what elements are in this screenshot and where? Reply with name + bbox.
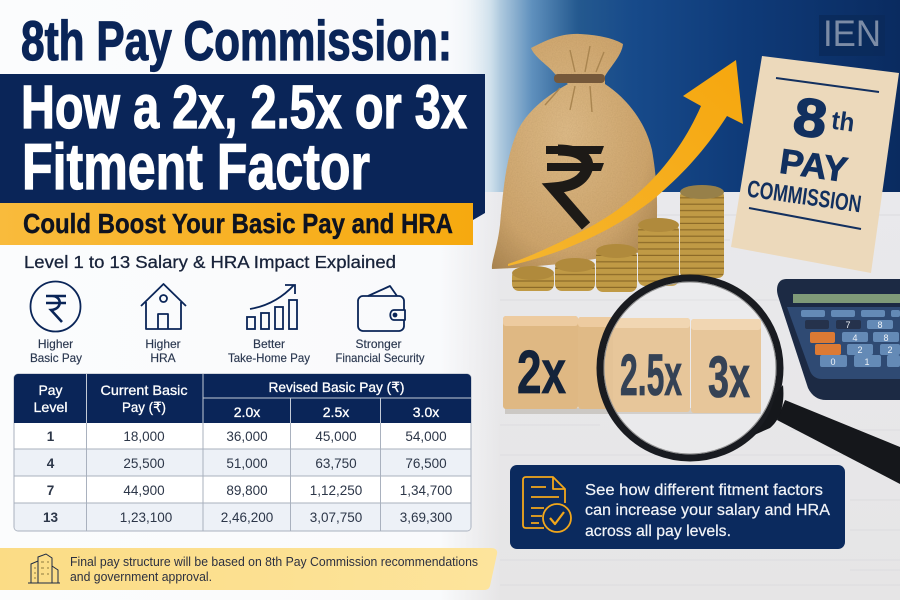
benefit: better take-home pay (228, 285, 310, 365)
table: revised basic pay: Level (34, 399, 68, 415)
wooden factor blocks: 2x (517, 338, 566, 406)
benefit: higher basic pay (30, 282, 82, 365)
footer note: and government approval. (70, 570, 212, 584)
calculator: 8 (877, 320, 883, 330)
yellow subtitle ribbon: Could Boost Your Basic Pay and HRA (23, 208, 453, 239)
table: revised basic pay: Pay (₹) (122, 399, 166, 415)
table: revised basic pay: 1,23,100 (120, 510, 172, 525)
table: revised basic pay: 1,34,700 (400, 483, 452, 498)
yellow subtitle ribbon (0, 203, 473, 245)
benefit: higher basic pay: Higher (38, 337, 73, 351)
8th Pay Commission card (731, 56, 899, 273)
benefit: better take-home pay: Take-Home Pay (228, 351, 310, 365)
calculator: 7 (845, 320, 851, 330)
8th Pay Commission card: 8 (790, 87, 831, 151)
benefit: stronger financial security: Stronger (355, 337, 402, 351)
left content background (0, 0, 500, 600)
illustration: money bag (492, 34, 657, 269)
table: revised basic pay: Current Basic (100, 382, 188, 398)
table: revised basic pay: 13 (43, 510, 58, 525)
table: revised basic pay: 3,69,300 (400, 510, 452, 525)
wooden factor blocks (503, 316, 761, 414)
footer note: Final pay structure will be based on 8th Pay Commission recommendations (70, 555, 478, 569)
table: revised basic pay: 89,800 (226, 483, 268, 498)
benefit: stronger financial security: Financial Security (336, 351, 424, 365)
table: revised basic pay: 2.0x (234, 404, 260, 420)
icon: rupee on bag (546, 146, 604, 226)
table: revised basic pay: 7 (47, 483, 54, 498)
table: revised basic pay: 51,000 (226, 456, 268, 471)
table: revised basic pay: 1,12,250 (310, 483, 362, 498)
table: revised basic pay: 76,500 (405, 456, 447, 471)
table: revised basic pay: 2.5x (323, 404, 349, 420)
watermark: IEN: IEN (823, 13, 881, 54)
icon: document with check (523, 477, 571, 532)
callout: see how different factors (510, 465, 845, 549)
calculator: 2 (887, 345, 893, 355)
calculator (777, 279, 900, 400)
coin stacks (512, 185, 724, 292)
calculator: 0 (830, 357, 836, 367)
table: revised basic pay: 44,900 (123, 483, 165, 498)
callout: see how different factors: See how different fitment factors (585, 482, 823, 499)
table: revised basic pay: 1 (47, 429, 55, 444)
table: revised basic pay: 18,000 (123, 429, 165, 444)
wooden desk surface (440, 192, 900, 600)
table: revised basic pay: 4 (47, 456, 55, 471)
benefit: higher HRA (141, 284, 186, 365)
table: revised basic pay: 63,750 (315, 456, 357, 471)
wooden factor blocks: 3x (708, 345, 750, 410)
callout: see how different factors: across all pay levels. (585, 523, 731, 540)
table: revised basic pay: 45,000 (315, 429, 357, 444)
calculator: 1 (864, 357, 870, 367)
table: revised basic pay (14, 374, 471, 531)
table: revised basic pay: 54,000 (405, 429, 447, 444)
table: revised basic pay: Pay (38, 382, 62, 398)
footer note (0, 548, 497, 590)
table: revised basic pay: 25,500 (123, 456, 165, 471)
sky backdrop (440, 0, 900, 193)
8th Pay Commission card: PAY (777, 142, 850, 190)
calculator: 8 (883, 333, 889, 343)
calculator: 2 (857, 345, 863, 355)
table: revised basic pay: 36,000 (226, 429, 268, 444)
title banner (0, 73, 485, 220)
8th Pay Commission card: th (830, 105, 857, 138)
table: revised basic pay: 3.0x (413, 404, 439, 420)
calculator: 4 (852, 333, 858, 343)
benefit: stronger financial security (336, 286, 424, 365)
magnifying glass (600, 278, 900, 484)
benefit: higher HRA: Higher (145, 337, 181, 351)
growth arrow (508, 60, 743, 266)
title banner: Fitment Factor (22, 130, 370, 203)
benefit: higher basic pay: Basic Pay (30, 351, 82, 365)
benefit: better take-home pay: Better (253, 337, 285, 351)
callout: see how different factors: can increase your salary and HRA (585, 502, 831, 519)
wooden factor blocks: 2.5x (620, 343, 682, 408)
title: 8th Pay Commission: 8th Pay Commission: (21, 9, 452, 72)
icon: buildings (28, 554, 60, 583)
title banner: How a 2x, 2.5x or 3x (21, 73, 467, 141)
subheading: Level 1 to 13 Salary & HRA Impact Explained (24, 252, 396, 272)
benefit: higher HRA: HRA (150, 351, 176, 365)
table: revised basic pay: 3,07,750 (310, 510, 362, 525)
table: revised basic pay: 2,46,200 (221, 510, 273, 525)
table: revised basic pay: Revised Basic Pay (₹) (268, 379, 404, 395)
